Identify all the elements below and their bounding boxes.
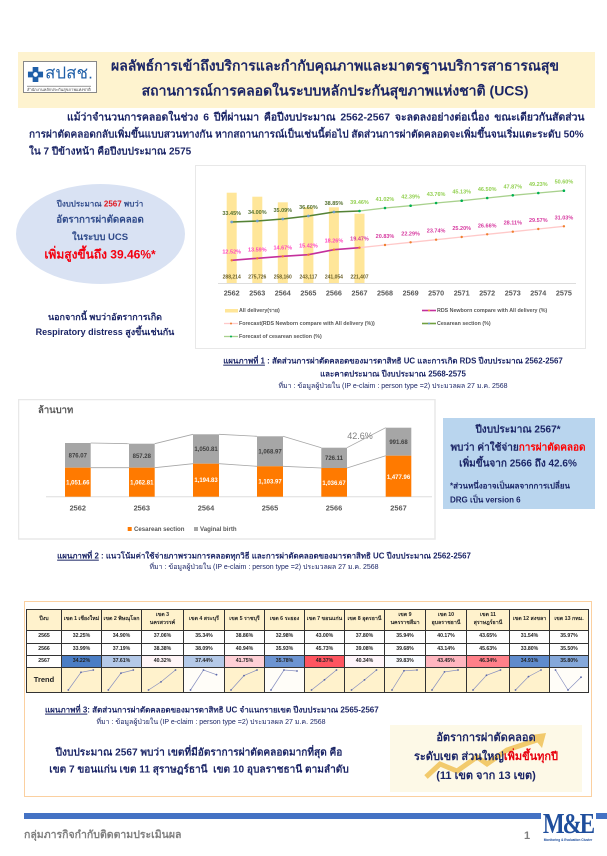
caption: figure 2 bbox=[57, 550, 471, 571]
logo: NHSO: สำนักงานหลักประกันสุขภาพแห่งชาติ bbox=[27, 86, 91, 91]
intro text bbox=[29, 110, 585, 158]
table: cesarean rate by region: 35.50% bbox=[560, 646, 578, 652]
note: respiratory distress: นอกจากนี้ พบว่าอัตราการเกิด bbox=[48, 312, 162, 322]
labels: RDS newborn: 18.26% bbox=[325, 239, 343, 245]
actual lines bbox=[232, 211, 360, 260]
legend: Vaginal birth bbox=[200, 526, 237, 533]
table: cesarean rate by region: 35.78% bbox=[276, 658, 293, 664]
table: cesarean rate by region: นครราชสีมา bbox=[390, 620, 420, 626]
table: cesarean rate by region: 43.65% bbox=[479, 633, 497, 639]
labels: delivery counts: 258,160 bbox=[274, 274, 292, 280]
table: cesarean rate by region: 2566 bbox=[38, 646, 50, 652]
logo: NHSO bbox=[23, 61, 97, 93]
intro text: ใน 7 ปีข้างหน้า คือปีงบประมาณ 2575 bbox=[29, 146, 191, 158]
panel: stacked bar chart of expenses: 1,062.81 bbox=[130, 480, 154, 486]
bar values bbox=[69, 440, 408, 462]
panel: stacked bar chart of expenses: 1,103.97 bbox=[258, 480, 282, 486]
legend bbox=[224, 308, 547, 340]
table: cesarean rate by region: 37.44% bbox=[195, 658, 213, 664]
table: cesarean rate by region: 34.90% bbox=[113, 633, 130, 639]
callout: regional increase: (11 เขต จาก 13 เขต) bbox=[436, 770, 536, 782]
table: cesarean rate by region: เขต 7 ขอนแก่น bbox=[307, 616, 342, 622]
labels: RDS newborn bbox=[222, 215, 573, 255]
table: cesarean rate by region: เขต 12 สงขลา bbox=[513, 616, 546, 622]
footer bar right bbox=[596, 813, 607, 819]
x axis years: 2573 bbox=[505, 288, 521, 298]
x axis years: 2563 bbox=[134, 504, 150, 512]
x axis years: 2568 bbox=[377, 288, 393, 298]
logo: M&E: M&E bbox=[543, 808, 593, 839]
labels: cesarean section: 39.46% bbox=[350, 200, 369, 206]
table: cesarean rate by region: 40.34% bbox=[356, 658, 373, 664]
table: cesarean rate by region: 40.17% bbox=[437, 633, 455, 639]
legend: All delivery(ราย) bbox=[239, 308, 280, 314]
x axis years bbox=[224, 288, 572, 298]
legend: Cesarean section bbox=[134, 526, 185, 533]
labels: cesarean section: 34.00% bbox=[248, 210, 267, 216]
x axis years: 2569 bbox=[403, 288, 419, 298]
callout: regional increase: ระดับเขต ส่วนใหญ่เพิ่มขึ้นทุกปี bbox=[414, 751, 558, 763]
x axis years: 2566 bbox=[326, 288, 342, 298]
table: cesarean rate by region: 39.68% bbox=[396, 646, 414, 652]
table: cesarean rate by region: 37.61% bbox=[113, 658, 130, 664]
title: สถานการณ์การคลอดในระบบหลักประกันสุขภาพแห่งชาติ (UCS) bbox=[142, 82, 528, 98]
x axis years: 2562 bbox=[224, 288, 240, 298]
table: cesarean rate by region: เขต 3 bbox=[156, 612, 169, 618]
table: cesarean rate by region: เขต 1 เชียงใหม่ bbox=[64, 616, 99, 622]
table: cesarean rate by region: เขต 11 bbox=[480, 612, 496, 618]
table: cesarean rate by region: 2565 bbox=[38, 633, 50, 639]
x axis years: 2574 bbox=[530, 288, 546, 298]
caption: figure 3: ที่มา : ข้อมูลผู้ป่วยใน (IP e-claim : person type =2) ประมวลผล 27 ม.ค. 2568 bbox=[96, 719, 326, 726]
labels: RDS newborn: 29.57% bbox=[529, 218, 548, 224]
table: cesarean rate by region: เขต 13 กทม. bbox=[554, 616, 584, 622]
labels: cesarean section: 46.50% bbox=[478, 187, 497, 193]
labels: cesarean section: 47.87% bbox=[503, 184, 522, 190]
labels: RDS newborn: 23.74% bbox=[427, 229, 446, 235]
labels: delivery counts: 275,726 bbox=[248, 274, 267, 280]
table: cesarean rate by region: 46.34% bbox=[479, 658, 497, 664]
caption: figure 3 bbox=[45, 704, 379, 726]
table: cesarean rate by region: เขต 2 พิษณุโลก bbox=[104, 616, 139, 622]
labels: RDS newborn: 22.29% bbox=[401, 231, 420, 237]
table: cesarean rate by region: 39.83% bbox=[396, 658, 414, 664]
callout: expense increase: DRG เป็น version 6 bbox=[450, 496, 521, 505]
summary text: เขต 7 ขอนแก่น เขต 11 สุราษฎร์ธานี เขต 10 อุบลราชธานี ตามลำดับ bbox=[49, 764, 349, 775]
table: cesarean rate by region: 37.19% bbox=[113, 646, 130, 652]
x axis years: 2567 bbox=[390, 504, 407, 512]
caption: figure 1 bbox=[223, 355, 563, 390]
panel: stacked bar chart of expenses bbox=[18, 399, 436, 540]
table: cesarean rate by region: เขต 8 อุดรธานี bbox=[347, 616, 382, 622]
bars: all delivery bbox=[227, 193, 364, 283]
logo: M&E: Monitoring & Evaluation Cluster bbox=[544, 838, 592, 842]
labels: cesarean section: 42.39% bbox=[401, 195, 420, 201]
x axis years: 2562 bbox=[70, 504, 86, 512]
table: cesarean rate by region: 43.14% bbox=[437, 646, 455, 652]
table: cesarean rate by region: เขต 9 bbox=[398, 612, 412, 618]
callout: expense increase: ปีงบประมาณ 2567* bbox=[475, 424, 561, 436]
table: cesarean rate by region: 39.08% bbox=[356, 646, 373, 652]
x axis years: 2575 bbox=[556, 288, 572, 298]
table: cesarean rate by region: 32.25% bbox=[73, 633, 90, 639]
header band bbox=[18, 52, 595, 108]
table: cesarean rate by region: 35.80% bbox=[560, 658, 578, 664]
table: cesarean rate by region: 40.32% bbox=[154, 658, 171, 664]
caption: figure 2: แผนภาพที่ 2 : แนวโน้มค่าใช้จ่ายภาพรวมการคลอดทุกวิธี และการผ่าตัดคลอดของมารดาสิทธิ UC ปีงบประมาณ 2562-2567 bbox=[57, 552, 471, 561]
callout ellipse: 39.46 percent: อัตราการผ่าตัดคลอด bbox=[56, 215, 144, 226]
table: cesarean rate by region: 38.86% bbox=[236, 633, 253, 639]
callout: regional increase: อัตราการผ่าตัดคลอด bbox=[436, 732, 536, 744]
legend bbox=[128, 526, 237, 533]
sparklines: trend per region bbox=[67, 669, 582, 691]
table: cesarean rate by region: 35.97% bbox=[560, 633, 578, 639]
x axis years: 2565 bbox=[300, 288, 316, 298]
bars: cesarean section bbox=[65, 456, 411, 497]
labels: cesarean section: 49.23% bbox=[529, 182, 548, 188]
table: cesarean rate by region: อุบลราชธานี bbox=[431, 620, 461, 626]
labels: RDS newborn: 26.66% bbox=[478, 223, 497, 229]
table: cesarean rate by region: 41.75% bbox=[236, 658, 253, 664]
callout: regional increase bbox=[390, 725, 582, 792]
panel: stacked bar chart of expenses: 1,036.67 bbox=[322, 481, 346, 487]
labels: cesarean section bbox=[222, 180, 573, 217]
footer bar bbox=[24, 813, 541, 819]
labels: RDS newborn: 13.59% bbox=[248, 247, 267, 253]
bar values: 1,050.81 bbox=[194, 447, 218, 453]
caption: figure 1: ที่มา : ข้อมูลผู้ป่วยใน (IP e-claim : person type =2) ประมวลผล 27 ม.ค. 2568 bbox=[278, 383, 508, 390]
table: cesarean rate by region: 35.94% bbox=[396, 633, 414, 639]
x axis years: 2571 bbox=[454, 288, 470, 298]
x axis years: 2565 bbox=[262, 504, 278, 512]
title: ผลลัพธ์การเข้าถึงบริการและกำกับคุณภาพและมาตรฐานบริการสาธารณสุข bbox=[111, 57, 559, 73]
table: cesarean rate by region: สุราษฎร์ธานี bbox=[474, 620, 502, 626]
table: cesarean rate by region: 34.91% bbox=[521, 658, 538, 664]
table: cesarean rate by region: 45.63% bbox=[479, 646, 497, 652]
labels: RDS newborn: 20.83% bbox=[376, 234, 394, 240]
bar values: 857.28 bbox=[133, 454, 152, 460]
labels: cesarean section: 35.09% bbox=[273, 208, 292, 214]
x axis years: 2564 bbox=[275, 288, 291, 298]
summary text: ปีงบประมาณ 2567 พบว่า เขตที่มีอัตราการผ่าตัดคลอดมากที่สุด คือ bbox=[56, 747, 342, 758]
table: cesarean rate by region: 40.94% bbox=[236, 646, 253, 652]
table: cesarean rate by region: 32.98% bbox=[276, 633, 293, 639]
table: cesarean rate by region: 48.37% bbox=[316, 658, 333, 664]
table: cesarean rate by region: 38.09% bbox=[195, 646, 213, 652]
table: cesarean rate by region: 35.93% bbox=[276, 646, 293, 652]
table: cesarean rate by region: 2567 bbox=[38, 658, 50, 664]
panel: line and bar chart of deliveries bbox=[195, 165, 586, 349]
caption: figure 2: ที่มา : ข้อมูลผู้ป่วยใน (IP e-claim : person type =2) ประมวลผล 27 ม.ค. 2568 bbox=[149, 564, 379, 571]
panel: regional table frame bbox=[24, 601, 592, 797]
labels: delivery counts: 241,054 bbox=[325, 274, 343, 280]
x axis years: 2570 bbox=[428, 288, 444, 298]
callout ellipse: 39.46 percent: ในระบบ UCS bbox=[72, 232, 128, 243]
labels: cesarean section: 38.85% bbox=[325, 201, 343, 207]
legend: Forecast of cesarean section (%) bbox=[239, 334, 322, 340]
table: cesarean rate by region: เขต 5 ราชบุรี bbox=[229, 616, 260, 622]
callout: expense increase: *ส่วนหนึ่งอาจเป็นผลจากการเปลี่ยน bbox=[450, 482, 570, 491]
table: cesarean rate by region: 33.80% bbox=[521, 646, 538, 652]
table: cesarean rate by region: นครสวรรค์ bbox=[150, 620, 175, 626]
table: cesarean rate by region: 33.99% bbox=[73, 646, 90, 652]
callout ellipse: 39.46 percent bbox=[16, 184, 185, 284]
table: cesarean rate by region: 43.00% bbox=[316, 633, 333, 639]
labels: RDS newborn: 19.47% bbox=[350, 237, 369, 243]
bar values: 876.07 bbox=[69, 454, 88, 460]
legend: Forecast(RDS Newborn compare with All delivery (%)) bbox=[239, 321, 375, 327]
connector lines bbox=[91, 428, 386, 468]
labels: cesarean section: 50.60% bbox=[555, 180, 573, 186]
table: cesarean rate by region: 31.54% bbox=[521, 633, 538, 639]
bar values: 1,068.97 bbox=[258, 450, 282, 456]
footer text: กลุ่มภารกิจกำกับติดตามประเมินผล bbox=[24, 829, 181, 841]
panel: stacked bar chart of expenses: 1,477.96 bbox=[387, 475, 411, 481]
callout: expense increase: พบว่า ค่าใช้จ่ายการผ่าตัดคลอด bbox=[450, 442, 586, 454]
note: respiratory distress bbox=[36, 310, 174, 338]
title bbox=[111, 57, 559, 100]
labels: delivery counts bbox=[223, 274, 369, 280]
icon: rising arrow bbox=[424, 733, 546, 779]
labels: cesarean section: 45.13% bbox=[452, 190, 471, 196]
bar values: 726.11 bbox=[325, 456, 344, 462]
table: cesarean rate by region: 38.38% bbox=[154, 646, 171, 652]
table: cesarean rate by region: 34.22% bbox=[73, 658, 90, 664]
x axis years: 2564 bbox=[198, 504, 215, 512]
line markers bbox=[230, 189, 565, 261]
panel: stacked bar chart of expenses: 1,194.83 bbox=[194, 478, 218, 484]
labels: RDS newborn: 14.67% bbox=[273, 245, 292, 251]
labels: RDS newborn: 31.03% bbox=[555, 215, 573, 221]
labels: RDS newborn: 25.20% bbox=[452, 226, 471, 232]
caption: figure 1: แผนภาพที่ 1 : สัดส่วนการผ่าตัดคลอดของมารดาสิทธิ UC และการเกิด RDS ปีงบประมาณ 2562-2567 bbox=[223, 357, 563, 366]
bars: vaginal birth bbox=[65, 428, 411, 468]
labels: cesarean section: 41.02% bbox=[376, 197, 394, 203]
growth label: 42.6% bbox=[347, 431, 373, 441]
table: cesarean rate by region: 45.73% bbox=[316, 646, 333, 652]
table: cesarean rate by region: 35.34% bbox=[195, 633, 213, 639]
table: cesarean rate by region: เขต 4 สระบุรี bbox=[189, 616, 219, 622]
bar values: 991.68 bbox=[389, 440, 408, 446]
page number: 1 bbox=[524, 830, 530, 842]
table: cesarean rate by region bbox=[26, 609, 589, 693]
table: cesarean rate by region: เขต 6 ระยอง bbox=[270, 616, 299, 622]
x axis years bbox=[70, 504, 407, 512]
labels: RDS newborn: 12.52% bbox=[222, 249, 241, 255]
callout ellipse: 39.46 percent: เพิ่มสูงขึ้นถึง 39.46%* bbox=[44, 247, 156, 261]
callout ellipse: 39.46 percent: ปีงบประมาณ 2567 พบว่า bbox=[57, 200, 143, 209]
table: cesarean rate by region: 37.80% bbox=[356, 633, 373, 639]
note: respiratory distress: Respiratory distress สูงขึ้นเช่นกัน bbox=[36, 327, 174, 337]
labels: delivery counts: 243,117 bbox=[299, 274, 318, 280]
table: cesarean rate by region: Trend bbox=[34, 675, 54, 684]
panel: stacked bar chart of expenses: 1,051.66 bbox=[66, 480, 90, 486]
logo: NHSO: สปสช. bbox=[45, 64, 93, 83]
x axis years: 2563 bbox=[249, 288, 265, 298]
x axis years: 2572 bbox=[479, 288, 495, 298]
table: cesarean rate by region: ปีงบ bbox=[39, 616, 49, 622]
labels: RDS newborn: 15.42% bbox=[299, 244, 318, 250]
legend: RDS Newborn compare with All delivery (%) bbox=[437, 308, 547, 314]
legend: Cesarean section (%) bbox=[437, 321, 491, 327]
callout: expense increase bbox=[443, 418, 595, 509]
summary text bbox=[49, 744, 349, 776]
labels: delivery counts: 221,407 bbox=[350, 274, 369, 280]
callout: expense increase: เพิ่มขึ้นจาก 2566 ถึง 42.6% bbox=[459, 458, 577, 470]
labels: cesarean section: 36.60% bbox=[299, 205, 318, 211]
labels: cesarean section: 43.76% bbox=[427, 192, 446, 198]
table: cesarean rate by region: 43.45% bbox=[437, 658, 455, 664]
caption: figure 3: แผนภาพที่ 3: สัดส่วนการผ่าตัดคลอดของมารดาสิทธิ UC จำแนกรายเขต ปีงบประมาณ 2565-2567 bbox=[45, 706, 379, 715]
caption: figure 1: และคาดประมาณ ปีงบประมาณ 2568-2575 bbox=[320, 370, 466, 379]
labels: RDS newborn: 28.11% bbox=[504, 221, 522, 227]
intro text: แม้ว่าจำนวนการคลอดในช่วง 6 ปีที่ผ่านมา คือปีงบประมาณ 2562-2567 จะลดลงอย่างต่อเนื่อง ขณะเดียวกันสัดส่วน bbox=[67, 112, 585, 123]
intro text: การผ่าตัดคลอดกลับเพิ่มขึ้นแบบสวนทางกัน หากสถานการณ์เป็นเช่นนี้ต่อไป สัดส่วนการผ่าตัดคลอดจะเพิ่มขึ้นจนเริ่มแตะระดับ 50% bbox=[29, 130, 584, 140]
forecast lines bbox=[360, 191, 564, 248]
table: cesarean rate by region: 37.06% bbox=[154, 633, 171, 639]
labels: delivery counts: 288,214 bbox=[223, 274, 241, 280]
x axis years: 2566 bbox=[326, 504, 342, 512]
labels: cesarean section: 33.45% bbox=[222, 211, 241, 217]
unit label: ล้านบาท bbox=[38, 404, 73, 416]
table: cesarean rate by region: เขต 10 bbox=[438, 612, 454, 618]
x axis years: 2567 bbox=[352, 288, 368, 298]
